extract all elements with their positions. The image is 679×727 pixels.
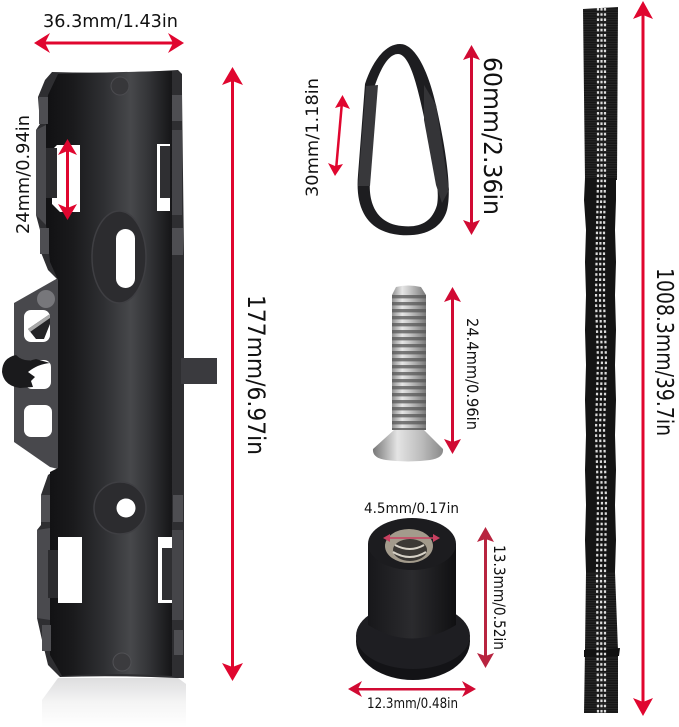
rubber nut [356,518,470,680]
arrow: carabiner gate [328,95,350,176]
strap webbing bottom [584,572,618,713]
strap stitch bar [584,648,620,657]
lower mount recess [94,482,146,534]
label: bracket width: 36.3mm/1.43in [43,11,178,32]
left wing holes [24,310,52,437]
carabiner thick side [424,85,449,203]
rail tabs [39,95,183,655]
oval recess [92,211,146,303]
carabiner [358,44,449,235]
nut barrel [368,544,456,638]
top window right [157,144,170,211]
left wing [14,278,58,469]
screw shaft [392,286,426,430]
upper dimple [111,77,129,95]
carabiner loop [358,44,449,235]
left rail lower [37,528,50,620]
screw head [373,430,443,462]
label: nut flange width: 12.3mm/0.48in [367,696,458,712]
arrow: nut height [477,527,494,668]
cord knot [2,355,50,388]
panel: bracket [2,70,217,727]
bottom window left [58,537,82,603]
wing rivet [37,290,55,308]
left rail upper [36,125,46,225]
label: carabiner gate: 30mm/1.18in [303,78,323,197]
strap webbing top [583,7,618,180]
arrow: strap length [633,1,653,716]
oval slot [116,229,135,288]
arrow: bracket width [34,33,184,53]
label: slot height: 24mm/0.94in [13,115,34,234]
arrow: screw length [444,287,461,454]
label: bracket height: 177mm/6.97in [242,295,270,455]
nut flange [356,602,470,680]
nut top [368,518,456,570]
bottom window right [158,537,172,603]
bracket channel [46,71,172,676]
nut threaded hole [385,529,433,563]
lower mount hole [116,498,136,518]
strap piece in hole [28,314,50,339]
bracket body [36,70,184,678]
label: strap length: 1008.3mm/39.7in [651,268,677,436]
carabiner sleeve [358,85,378,186]
lower dimple [113,653,131,671]
right rail [172,130,183,620]
bracket floor reflection [42,678,186,727]
label: nut inner diameter: 4.5mm/0.17in [364,501,459,517]
strap reflective dots [596,8,606,713]
arrow: nut flange width [348,681,476,697]
label: nut height: 13.3mm/0.52in [490,545,509,650]
right tab [181,358,217,384]
arrow: carabiner height [463,45,480,235]
arrow: slot height [58,139,77,220]
label: screw length: 24.4mm/0.96in [463,318,482,430]
top window left [52,145,80,212]
arrow: bracket height [222,67,243,681]
strap [583,7,620,713]
label: carabiner height: 60mm/2.36in [478,57,507,215]
screw [373,286,443,462]
arrow: nut inner diameter [383,534,440,542]
strap elastic section [584,178,616,572]
screw threads [392,293,426,430]
